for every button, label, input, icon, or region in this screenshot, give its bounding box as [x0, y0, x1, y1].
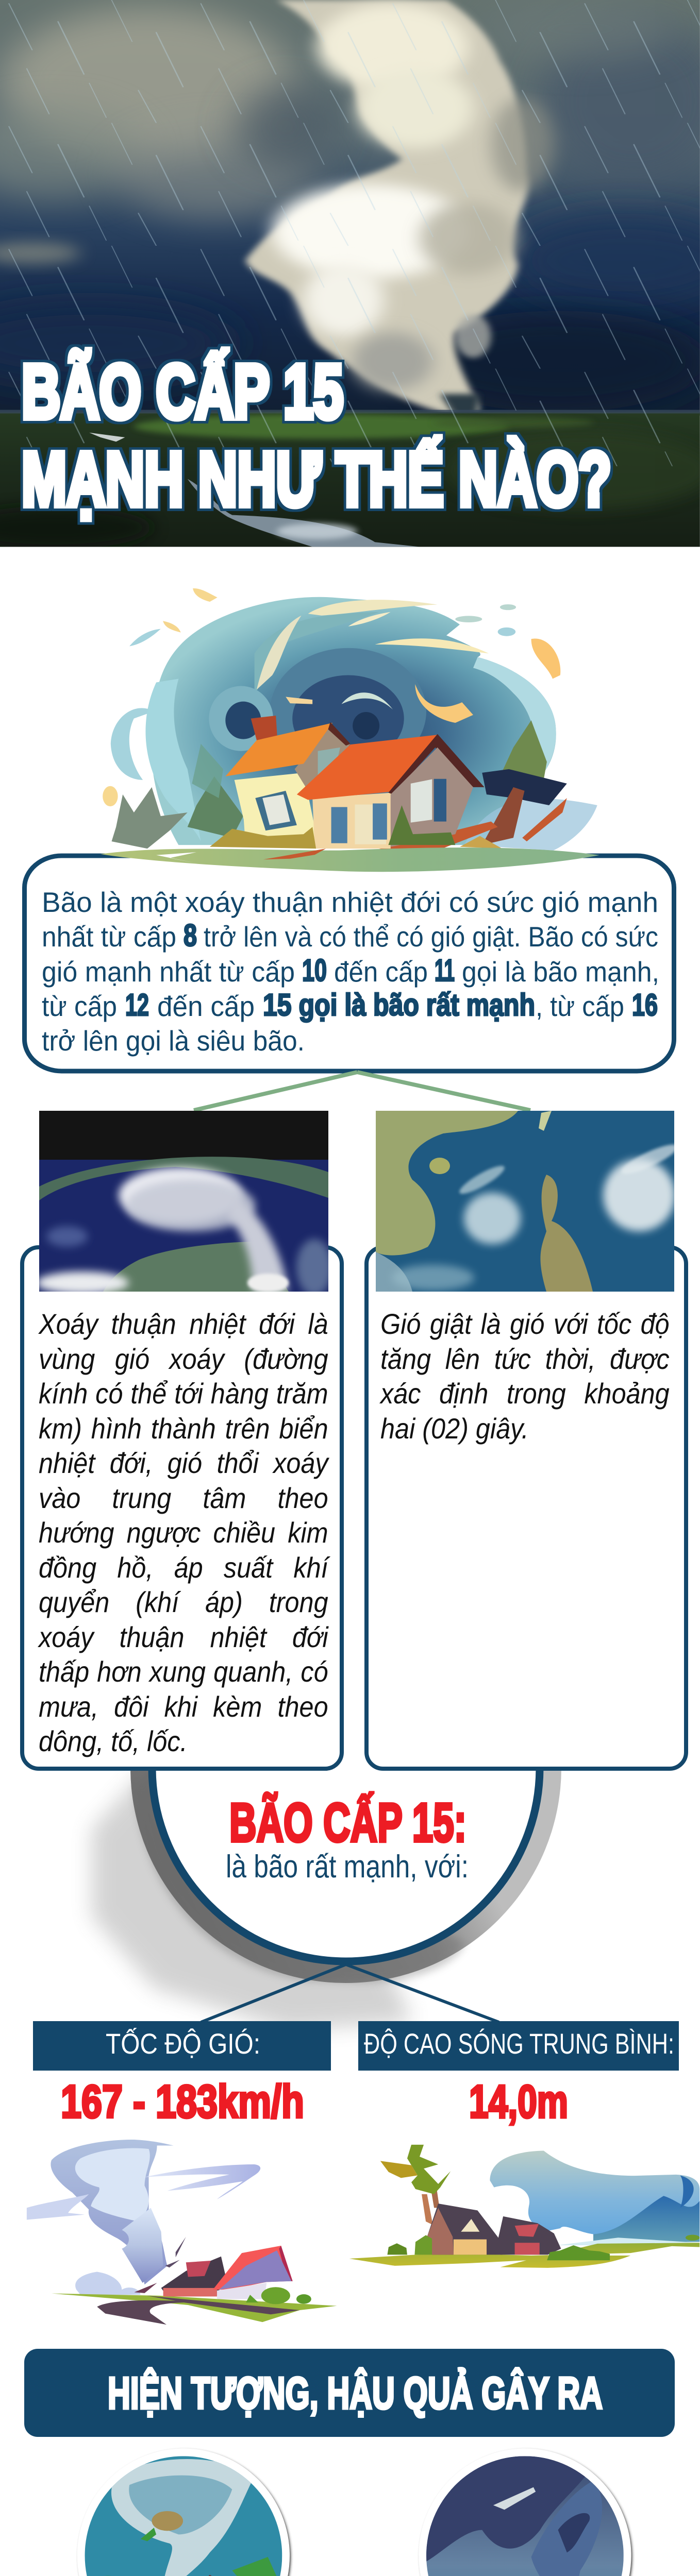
illustration: house in a storm — [101, 588, 599, 872]
info box text: Bão là một xoáy thuận nhiệt đới có sức gió mạnh — [42, 886, 658, 918]
text block: wind gust definition: tăng lên tức thời, được — [380, 1343, 670, 1375]
info box text: trở lên và có thể có gió giật. Bão có sức — [204, 921, 658, 953]
text block: tropical cyclone definition: dông, tố, lốc. — [39, 1725, 188, 1757]
info box text: từ cấp — [42, 990, 117, 1022]
text block: wind gust definition — [379, 1308, 670, 1445]
badge heading: BÃO CẤP 15: — [229, 1792, 466, 1853]
connector lines from info box to images — [194, 1072, 530, 1110]
info box text: 8 — [184, 918, 197, 953]
semicircle badge: storm level 15 — [148, 1769, 543, 1965]
info box text: đến cấp — [334, 956, 428, 988]
info box text: 16 — [632, 988, 658, 1022]
info box text: 10 — [302, 953, 327, 988]
text block: tropical cyclone definition: kính có thể tới hàng trăm — [39, 1377, 328, 1410]
title — [22, 349, 611, 522]
info box text: , từ cấp — [536, 990, 624, 1022]
text block: tropical cyclone definition — [38, 1308, 330, 1757]
circular image: ship in rough sea — [419, 2448, 632, 2576]
wave height value: 14,0m — [469, 2076, 568, 2128]
wave height label — [358, 2021, 679, 2071]
text block: wind gust definition: Gió giật là gió với tốc độ — [380, 1308, 670, 1340]
text block: tropical cyclone definition: mưa, đôi khi kèm theo — [39, 1690, 328, 1723]
info box text: gọi là bão mạnh, — [462, 956, 659, 988]
illustration: tornado hitting houses — [27, 2140, 337, 2325]
wind speed label — [33, 2021, 331, 2071]
text block: tropical cyclone definition: nhiệt đới, gió thổi xoáy — [39, 1447, 328, 1479]
image: satellite view of hurricane over the gulf — [36, 1111, 332, 1296]
section heading bar — [24, 2349, 675, 2437]
text block: tropical cyclone definition: quyển (khí áp) trong — [39, 1586, 328, 1618]
info box text: 12 — [125, 988, 149, 1022]
info box text: 11 — [435, 953, 455, 988]
text block: tropical cyclone definition: Xoáy thuận nhiệt đới là — [39, 1308, 328, 1340]
wind speed label: TỐC ĐỘ GIÓ: — [106, 2027, 260, 2060]
illustration: tsunami wave and houses — [349, 2145, 699, 2268]
info box text: đến cấp — [157, 990, 255, 1022]
info box text: 15 gọi là bão rất mạnh — [263, 988, 535, 1022]
text block: wind gust definition: hai (02) giây. — [380, 1412, 529, 1445]
info box text: nhất từ cấp — [42, 921, 176, 953]
card: gust frame — [366, 1247, 686, 1769]
info box frame — [25, 856, 674, 1071]
title: BÃO CẤP 15 — [22, 349, 343, 434]
info box text — [42, 886, 659, 1057]
text block: tropical cyclone definition: vùng gió xoáy (đường — [39, 1343, 328, 1375]
text block: tropical cyclone definition: đồng hồ, áp suất khí — [39, 1551, 328, 1584]
text block: tropical cyclone definition: hướng ngược chiều kim — [39, 1516, 328, 1549]
circular image: destruction — [77, 2448, 291, 2576]
text block: tropical cyclone definition: xoáy thuận nhiệt đới — [39, 1621, 328, 1653]
text block: tropical cyclone definition: thấp hơn xung quanh, có — [39, 1655, 328, 1688]
text block: wind gust definition: xác định trong khoảng — [380, 1377, 670, 1410]
hero image: storm and tornado over fields — [0, 0, 700, 549]
info box text: trở lên gọi là siêu bão. — [42, 1025, 305, 1057]
badge shadow — [83, 1771, 561, 2036]
image: satellite map of typhoons near the Philippines — [376, 1111, 680, 1292]
text block: tropical cyclone definition: km) hình thành trên biển — [39, 1412, 328, 1445]
connector lines from badge to data boxes — [201, 1964, 499, 2022]
card: tropical cyclone frame — [22, 1247, 342, 1769]
wind speed value: 167 - 183km/h — [61, 2076, 304, 2128]
text block: tropical cyclone definition: vào trung tâm theo — [39, 1482, 328, 1514]
info box text: gió mạnh nhất từ cấp — [42, 956, 295, 988]
badge subheading: là bão rất mạnh, với: — [226, 1849, 469, 1885]
